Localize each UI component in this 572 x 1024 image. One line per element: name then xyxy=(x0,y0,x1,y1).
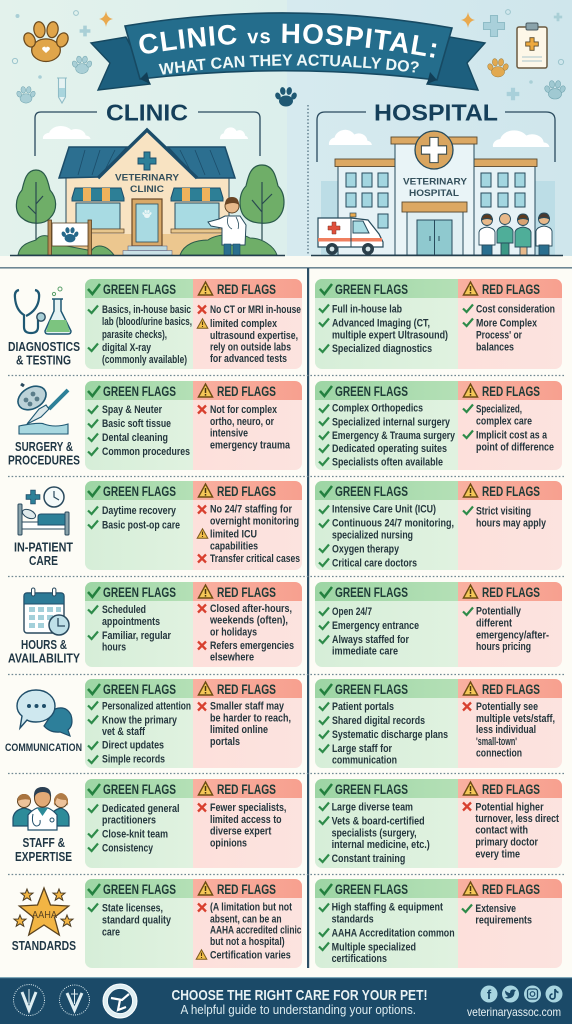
red flags: contact with xyxy=(475,825,528,837)
vertical dotted divider in hero xyxy=(307,105,309,255)
green flags: Open 24/7 xyxy=(332,606,372,618)
label xyxy=(8,340,80,368)
subtitle text: WHAT CAN THEY ACTUALLY DO? xyxy=(158,54,419,75)
category: hours and availability xyxy=(8,588,81,666)
panel: hours hospital xyxy=(315,582,562,667)
red flags: intensive xyxy=(210,428,248,440)
green flags: GREEN FLAGS xyxy=(103,782,176,797)
green flags: standards xyxy=(332,913,374,925)
red flags xyxy=(198,782,286,850)
red flags: Process' or xyxy=(476,329,523,341)
green flags: Daytime recovery xyxy=(102,505,177,517)
red flags: 'small-town' xyxy=(476,736,517,748)
red flags: hours pricing xyxy=(476,641,531,653)
label: DIAGNOSTICS xyxy=(8,340,80,354)
red flags: RED FLAGS xyxy=(482,882,540,897)
green flags: GREEN FLAGS xyxy=(335,585,408,600)
green flags: standard quality xyxy=(102,914,172,926)
red flags: elsewhere xyxy=(210,651,254,663)
green flags xyxy=(88,682,191,766)
category: communication xyxy=(5,690,82,754)
green flags: AAHA Accreditation common xyxy=(332,927,455,939)
green flags: Emergency entrance xyxy=(332,620,419,632)
label: IN-PATIENT xyxy=(14,541,73,555)
panel: standards clinic xyxy=(85,879,302,968)
red flags: portals xyxy=(210,736,240,748)
green flags: Intensive Care Unit (ICU) xyxy=(332,504,436,516)
green flags: communication xyxy=(332,755,397,767)
green flags: Direct updates xyxy=(102,740,164,752)
green flags xyxy=(88,585,176,654)
green flags: lab (blood/urine basics, xyxy=(102,316,192,328)
green flags xyxy=(319,782,430,865)
green flags: Oxygen therapy xyxy=(332,543,400,555)
red flags: absent, can be an xyxy=(210,913,282,925)
red flags: RED FLAGS xyxy=(217,484,276,499)
red flags: RED FLAGS xyxy=(217,282,276,297)
red flags: RED FLAGS xyxy=(482,484,540,499)
red flags xyxy=(197,282,301,365)
green flags: Continuous 24/7 monitoring, xyxy=(332,518,454,530)
red flags: Strict visiting xyxy=(476,505,531,517)
green flags: GREEN FLAGS xyxy=(335,882,408,897)
footer band xyxy=(0,977,572,1024)
panel: communication hospital xyxy=(315,679,562,768)
social icons xyxy=(480,986,562,1002)
panel: diagnostics clinic xyxy=(85,279,302,369)
red flags: every time xyxy=(475,848,520,860)
label xyxy=(15,836,72,864)
panel: in-patient clinic xyxy=(85,481,302,570)
green flags: internal medicine, etc.) xyxy=(332,839,430,851)
red flags: More Complex xyxy=(476,317,538,329)
category: diagnostics and testing xyxy=(8,287,80,368)
red flags: RED FLAGS xyxy=(482,782,540,797)
label: STAFF & xyxy=(22,836,65,850)
red flags: Potentially xyxy=(476,606,522,618)
green flags: immediate care xyxy=(332,646,398,658)
green flags: Simple records xyxy=(102,754,165,766)
red flags: diverse expert xyxy=(210,826,272,838)
hospital heading and bracket: HOSPITAL xyxy=(374,100,498,126)
green flags: appointments xyxy=(102,616,160,628)
red flags xyxy=(463,484,547,529)
clinic vet doctor xyxy=(208,197,246,255)
clinic paw sign xyxy=(48,220,92,255)
red flags: Specialized, xyxy=(476,403,522,415)
green flags: Common procedures xyxy=(102,446,190,458)
red flags xyxy=(198,585,294,663)
hospital staff group xyxy=(479,213,552,255)
red flags xyxy=(198,682,291,748)
icon: calendar with clock xyxy=(24,588,69,635)
red flags: Implicit cost as a xyxy=(476,429,548,441)
ribbon title banner xyxy=(90,12,486,91)
green flags: Patient portals xyxy=(332,701,394,713)
green flags: Advanced Imaging (CT, xyxy=(332,317,430,329)
panel: standards hospital xyxy=(315,879,562,968)
decorative icons left: paws, plus, vial xyxy=(12,11,113,103)
green flags: Emergency & Trauma surgery xyxy=(332,430,456,442)
red flags: limited complex xyxy=(210,318,278,330)
red flags xyxy=(463,585,549,653)
association logos xyxy=(14,984,137,1018)
green flags: GREEN FLAGS xyxy=(335,484,408,499)
red flags: RED FLAGS xyxy=(217,782,276,797)
label xyxy=(8,440,80,468)
label: SURGERY & xyxy=(15,440,73,454)
hospital building illustration: VETERINARY xyxy=(403,176,468,188)
category: surgery and procedures xyxy=(8,381,80,468)
red flags: RED FLAGS xyxy=(217,882,276,897)
red flags: primary doctor xyxy=(475,837,539,849)
panel: staff clinic xyxy=(85,779,302,868)
clinic building illustration: CLINIC xyxy=(130,184,164,195)
icon: stethoscope and flask xyxy=(15,287,71,334)
trees and bushes around clinic xyxy=(16,165,284,255)
label: COMMUNICATION xyxy=(5,742,82,754)
hospital building illustration xyxy=(321,130,555,255)
label: PROCEDURES xyxy=(8,454,80,468)
green flags: High staffing & equipment xyxy=(332,902,443,914)
label: EXPERTISE xyxy=(15,850,72,864)
category: staff and expertise xyxy=(13,787,72,864)
green flags: (commonly available) xyxy=(102,354,187,366)
panel: in-patient hospital xyxy=(315,481,562,570)
green flags: Consistency xyxy=(102,842,154,854)
center vertical divider xyxy=(307,268,309,968)
green flags: certifications xyxy=(332,953,387,965)
category: standards xyxy=(12,888,76,953)
green flags xyxy=(319,682,448,767)
green flags: State licenses, xyxy=(102,902,163,914)
icon: speech bubbles xyxy=(17,690,72,736)
panel: surgery hospital xyxy=(315,381,562,470)
green flags: parasite checks), xyxy=(102,329,167,341)
label: & TESTING xyxy=(16,354,71,368)
panel: diagnostics hospital xyxy=(315,279,562,369)
ambulance xyxy=(318,213,383,255)
hospital building illustration: HOSPITAL xyxy=(409,188,459,199)
green flags: digital X-ray xyxy=(102,342,152,354)
label: HOURS & xyxy=(21,638,67,652)
red flags xyxy=(198,384,291,452)
green flags: GREEN FLAGS xyxy=(103,682,176,697)
green flags: GREEN FLAGS xyxy=(103,585,176,600)
red flags: RED FLAGS xyxy=(482,384,540,399)
red flags: requirements xyxy=(475,915,532,927)
green flags: Multiple specialized xyxy=(332,941,416,953)
red flags: capabilities xyxy=(210,540,258,552)
green flags: vet & staff xyxy=(102,726,145,738)
red flags: ortho, neuro, or xyxy=(210,416,275,428)
label: STANDARDS xyxy=(12,939,76,953)
green flags xyxy=(88,882,176,938)
red flags xyxy=(463,282,555,353)
red flags: RED FLAGS xyxy=(217,384,276,399)
red flags: emergency/after- xyxy=(476,629,549,641)
icon: hospital bed with clock xyxy=(18,487,69,535)
green flags: Dental cleaning xyxy=(102,432,168,444)
red flags: or holidays xyxy=(210,626,257,638)
green flags: GREEN FLAGS xyxy=(335,384,408,399)
green flags: Shared digital records xyxy=(332,715,425,727)
red flags: limited online xyxy=(210,724,268,736)
footer heading: CHOOSE THE RIGHT CARE FOR YOUR PET! xyxy=(172,987,428,1004)
green flags: Complex Orthopedics xyxy=(332,403,423,415)
clinic heading and bracket: CLINIC xyxy=(106,100,188,126)
red flags: limited ICU xyxy=(210,529,257,541)
green flags: Specialized internal surgery xyxy=(332,416,451,428)
green flags: practitioners xyxy=(102,815,156,827)
green flags xyxy=(88,384,190,458)
green flags: GREEN FLAGS xyxy=(103,384,176,399)
green flags: GREEN FLAGS xyxy=(335,782,408,797)
footer subtitle: A helpful guide to understanding your options. xyxy=(180,1002,416,1017)
green flags: Full in-house lab xyxy=(332,303,402,315)
panel: surgery clinic xyxy=(85,381,302,470)
icon: surgical lamp and scalpel xyxy=(14,381,68,434)
panel: hours clinic xyxy=(85,582,302,667)
icon: dark paw xyxy=(274,87,298,106)
red flags: different xyxy=(476,617,512,629)
green flags: Know the primary xyxy=(102,714,178,726)
red flags: hours may apply xyxy=(476,517,547,529)
green flags: Close-knit team xyxy=(102,828,168,840)
category: in-patient care xyxy=(14,487,73,568)
green flags: Large staff for xyxy=(332,743,393,755)
red flags: weekends (often), xyxy=(209,615,288,627)
green flags: Basic post-op care xyxy=(102,519,180,531)
green flags: Critical care doctors xyxy=(332,557,417,569)
green flags: GREEN FLAGS xyxy=(103,882,176,897)
green flags xyxy=(319,282,448,355)
green flags: Constant training xyxy=(332,853,405,865)
red flags: Fewer specialists, xyxy=(210,802,286,814)
green flags: Basic soft tissue xyxy=(102,418,171,430)
label: CARE xyxy=(29,554,58,568)
red flags: opinions xyxy=(210,838,247,850)
green flags: Vets & board-certified xyxy=(332,815,425,827)
red flags: RED FLAGS xyxy=(482,282,540,297)
red flags: RED FLAGS xyxy=(482,585,540,600)
green flags xyxy=(88,282,192,366)
red flags xyxy=(197,484,300,565)
clinic building illustration: VETERINARY xyxy=(115,172,180,184)
green flags xyxy=(319,484,454,569)
red flags: less individual xyxy=(476,724,536,736)
green flags: specialists (surgery, xyxy=(332,827,417,839)
green flags xyxy=(88,484,180,531)
decorative icons right: clipboard, paws, plus xyxy=(461,10,566,100)
green flags: GREEN FLAGS xyxy=(335,682,408,697)
green flags: Personalized attention xyxy=(102,700,191,712)
label: AVAILABILITY xyxy=(8,652,81,666)
green flags: Familiar, regular xyxy=(102,630,172,642)
red flags: balances xyxy=(476,341,514,353)
green flags xyxy=(319,585,419,658)
green flags: Basics, in-house basic xyxy=(102,304,191,316)
red flags: complex care xyxy=(476,415,532,427)
panel: communication clinic xyxy=(85,679,302,768)
green flags: Always staffed for xyxy=(332,634,410,646)
green flags: GREEN FLAGS xyxy=(103,484,176,499)
red flags: RED FLAGS xyxy=(217,585,276,600)
title text: CLINIC vs HOSPITAL: xyxy=(139,24,436,58)
green flags: hours xyxy=(102,642,126,654)
green flags: care xyxy=(102,926,120,938)
green flags: GREEN FLAGS xyxy=(103,282,176,297)
hospital heading and bracket xyxy=(317,100,555,162)
red flags: connection xyxy=(476,748,522,760)
red flags xyxy=(463,384,554,453)
green flags xyxy=(319,882,455,965)
red flags: limited access to xyxy=(210,814,282,826)
red flags: RED FLAGS xyxy=(482,682,540,697)
clinic heading and bracket xyxy=(35,100,260,156)
icon: AAHA star: AAHA xyxy=(32,910,57,921)
green flags: Large diverse team xyxy=(332,801,413,813)
icon: team of three doctors xyxy=(13,787,69,830)
green flags: multiple expert Ultrasound) xyxy=(332,329,448,341)
green flags: GREEN FLAGS xyxy=(335,282,408,297)
green flags xyxy=(88,782,180,854)
red flags: Smaller staff may xyxy=(210,701,285,713)
green flags: specialized nursing xyxy=(332,530,413,542)
red flags: Potential higher xyxy=(475,801,544,813)
green flags: Scheduled xyxy=(102,604,146,616)
red flags: RED FLAGS xyxy=(217,682,276,697)
green flags: Specialists often available xyxy=(332,456,443,468)
red flags: Potentially see xyxy=(476,701,538,713)
red flags xyxy=(196,882,301,961)
label xyxy=(14,541,73,568)
red flags xyxy=(463,682,555,760)
green flags xyxy=(319,384,456,468)
panel: staff hospital xyxy=(315,779,562,868)
green flags: Dedicated operating suites xyxy=(332,443,447,455)
green flags: Systematic discharge plans xyxy=(332,729,448,741)
label xyxy=(8,638,81,666)
red flags xyxy=(463,782,559,860)
social icons: f xyxy=(487,987,492,1002)
red flags xyxy=(462,882,540,927)
red flags: Not for complex xyxy=(210,404,278,416)
clinic building illustration xyxy=(43,126,248,255)
green flags: Dedicated general xyxy=(102,803,180,815)
green flags: Spay & Neuter xyxy=(102,404,163,416)
green flags: Specialized diagnostics xyxy=(332,343,432,355)
red flags: Extensive xyxy=(475,903,516,915)
